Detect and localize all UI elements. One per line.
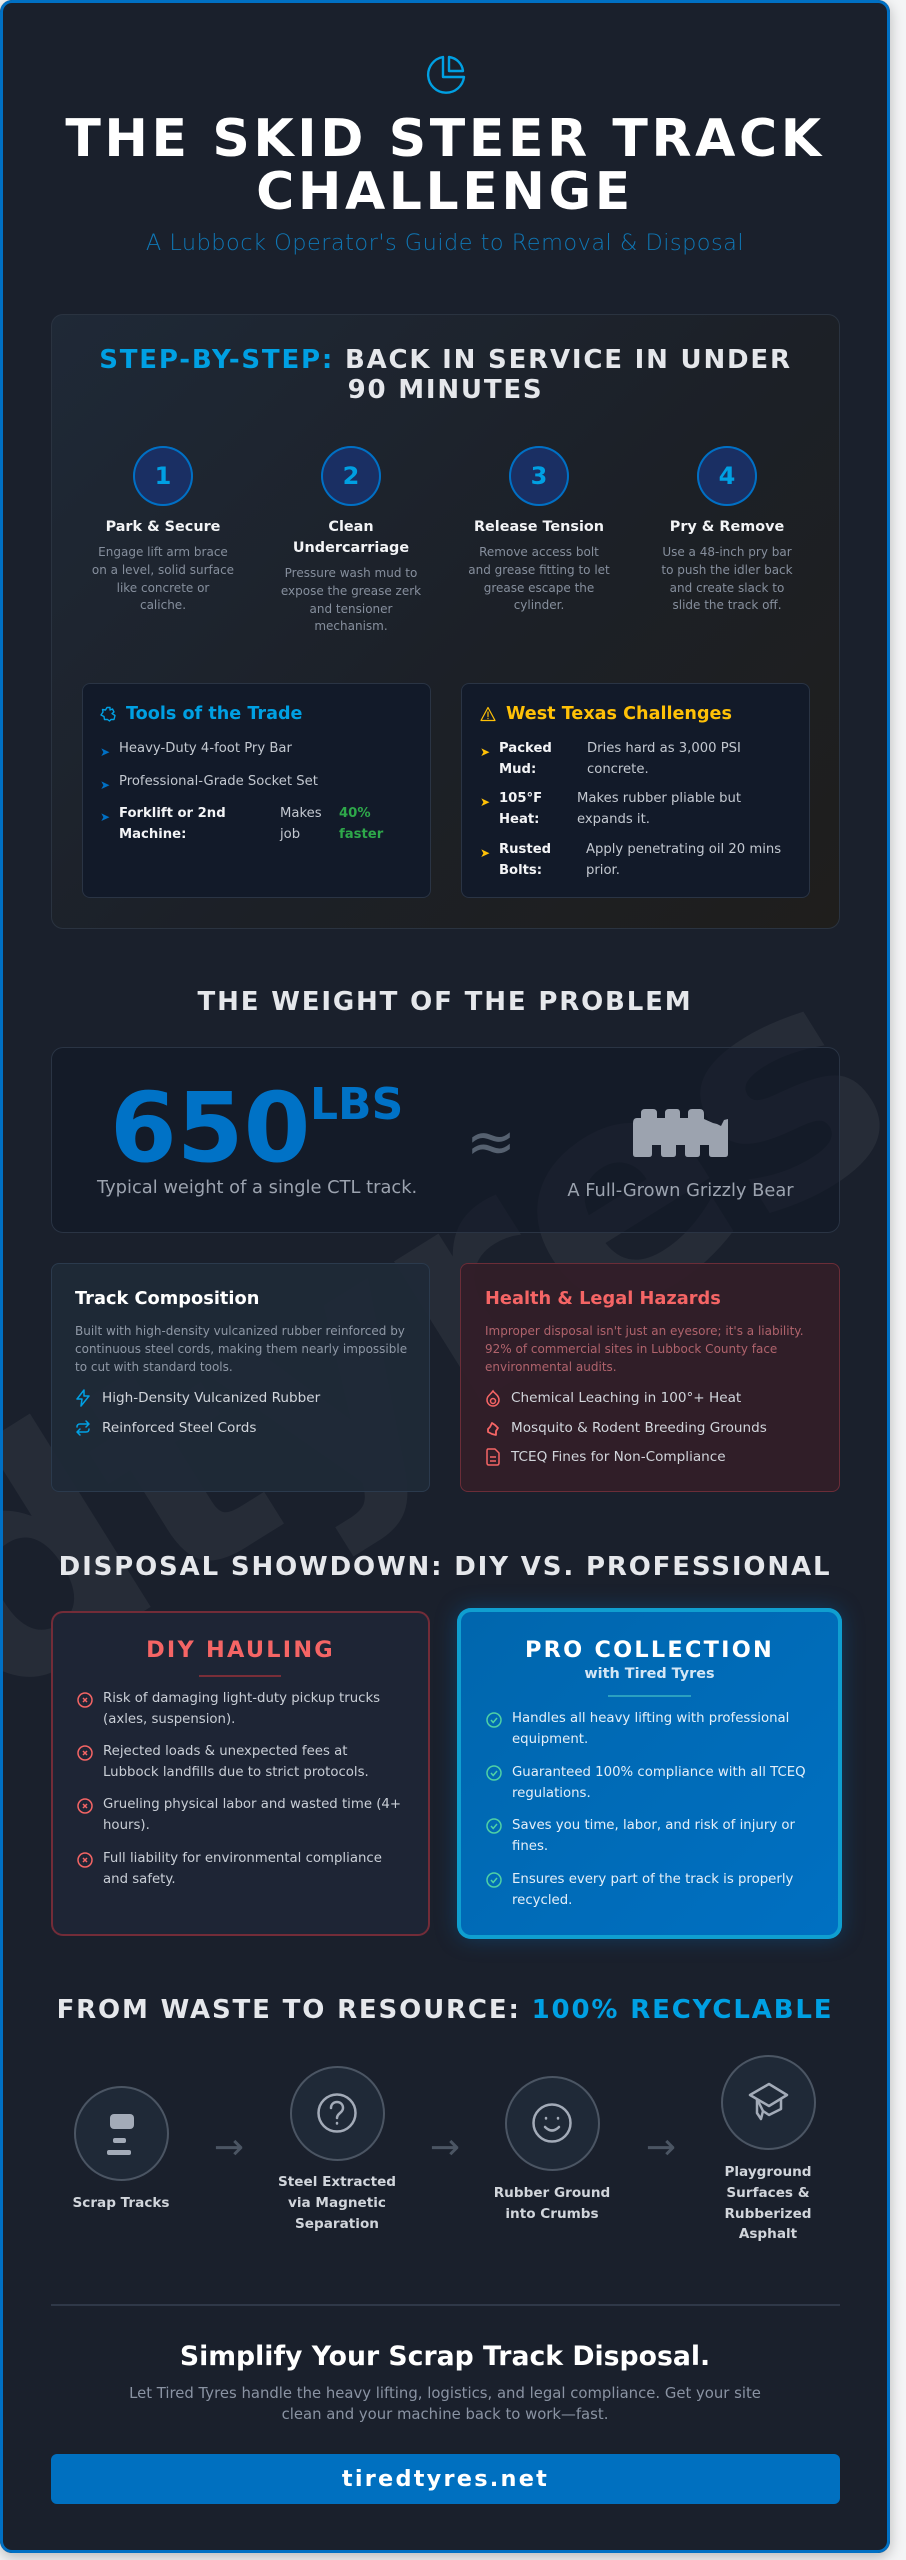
panel: pro collection [457, 1608, 842, 1939]
recycling step 3: rubber crumbs: into Crumbs [505, 2206, 599, 2222]
list: DIY risks: (axles, suspension). [103, 1712, 235, 1727]
call to action text: clean and your machine back to work—fast. [282, 2405, 608, 2423]
challenge list: 105°F [499, 791, 542, 806]
tool list [100, 741, 384, 842]
challenge list: concrete. [587, 762, 649, 777]
call to action heading: Simplify Your Scrap Track Disposal. [180, 2341, 710, 2372]
panel: DIY hauling [51, 1611, 430, 1936]
panel: weight comparison: LBS [310, 1079, 403, 1130]
step 2: expose the grease zerk [281, 584, 421, 598]
list: pro benefits: regulations. [512, 1786, 591, 1801]
tool list: Forklift or 2nd [119, 806, 226, 821]
tool list: faster [339, 827, 383, 842]
list: pro benefits: Ensures every part of the track is properly [512, 1872, 793, 1887]
heading: step-by-step: 90 MINUTES [348, 375, 543, 405]
hazard: pests: Mosquito & Rodent Breeding Grounds [511, 1420, 767, 1436]
step 4: Pry & Remove [670, 519, 784, 535]
step 3: grease escape the [484, 581, 594, 595]
step 1: Engage lift arm brace [98, 545, 228, 559]
call to action text [129, 2384, 761, 2423]
caption: track weight: Typical weight of a single CTL track. [97, 1177, 417, 1198]
heading: pro collection: PRO COLLECTION [525, 1637, 774, 1663]
challenge list: prior. [586, 863, 620, 878]
tool list: Professional-Grade Socket Set [119, 774, 318, 789]
icon: graduation cap [721, 2055, 816, 2150]
recycling step 1: scrap tracks [72, 2086, 170, 2211]
step 3 [468, 446, 610, 612]
challenge list: Mud: [499, 762, 536, 777]
tool list: ➤ [100, 745, 110, 759]
list: pro benefits: fines. [512, 1839, 548, 1854]
recycling step 2: steel extraction [278, 2066, 396, 2232]
step 2: mechanism. [314, 619, 388, 633]
step 3: Release Tension [474, 519, 604, 535]
step 1: like concrete or [117, 581, 209, 595]
panel: track composition [51, 1263, 430, 1492]
step 4: to push the idler back [661, 563, 793, 577]
list: pro benefits: Handles all heavy lifting with professional [512, 1711, 789, 1726]
accent rule [608, 1695, 691, 1697]
recycling step 4: end products: Rubberized [724, 2206, 812, 2222]
recycling step 3: rubber crumbs: Rubber Ground [494, 2185, 610, 2201]
heading: hazards: Health & Legal Hazards [485, 1288, 721, 1309]
tool list: Machine: [119, 827, 186, 842]
step 4: Use a 48-inch pry bar [662, 545, 792, 559]
panel: step-by-step [51, 314, 840, 929]
challenge list: ➤ [480, 795, 490, 809]
list: pro benefits [486, 1711, 806, 1908]
recycling step 2: steel extraction: via Magnetic [288, 2195, 386, 2211]
challenge list: Dries hard as 3,000 PSI [587, 741, 741, 756]
list: DIY risks: Grueling physical labor and wasted time (4+ [103, 1797, 401, 1812]
big number: 650 lbs [110, 1072, 403, 1184]
tool list: ➤ [100, 778, 110, 792]
step 2: Clean [328, 519, 374, 535]
step 3: Remove access bolt [479, 545, 599, 559]
challenge list: ➤ [480, 846, 490, 860]
approximately equal sign: ≈ [466, 1107, 516, 1177]
challenge list: Makes rubber pliable but [577, 791, 741, 806]
icon: smiley circle [505, 2076, 600, 2171]
step 2: and tensioner [310, 602, 392, 616]
step 1: Park & Secure [106, 519, 220, 535]
heading: DIY hauling: DIY HAULING [146, 1637, 335, 1663]
list: pro benefits: Saves you time, labor, and risk of injury or [512, 1818, 795, 1833]
title [65, 109, 825, 222]
challenge list: ➤ [480, 745, 490, 759]
list: DIY risks: Lubbock landfills due to strict protocols. [103, 1765, 369, 1780]
icon: question circle [290, 2066, 385, 2161]
icon: scrap track [74, 2086, 169, 2181]
call to action text: Let Tired Tyres handle the heavy lifting, logistics, and legal compliance. Get your site [129, 2384, 761, 2402]
description: Built with high-density vulcanized rubber reinforced by [75, 1324, 405, 1338]
list: DIY risks: hours). [103, 1818, 150, 1833]
recycling step 4: end products: Playground [724, 2164, 812, 2180]
panel: weight comparison [51, 1047, 840, 1233]
tool list: Makes [280, 806, 322, 821]
challenge list: Bolts: [499, 863, 542, 878]
list: DIY risks [77, 1691, 401, 1887]
list: DIY risks: and safety. [103, 1872, 176, 1887]
heading: disposal showdown: DISPOSAL SHOWDOWN: DIY VS. PROFESSIONAL [59, 1552, 831, 1582]
description: environmental audits. [485, 1360, 617, 1374]
description: Improper disposal isn't just an eyesore; it's a liability. [485, 1324, 804, 1338]
challenge list: Packed [499, 741, 552, 756]
challenge list: Rusted [499, 842, 551, 857]
icon: puzzle piece [100, 706, 116, 722]
list: pro benefits: Guaranteed 100% compliance with all TCEQ [512, 1765, 806, 1780]
step 1: on a level, solid surface [92, 563, 234, 577]
heading: tools: Tools of the Trade [126, 704, 302, 724]
description [75, 1324, 407, 1374]
description: to cut with standard tools. [75, 1360, 233, 1374]
recycling step 2: steel extraction: Separation [295, 2216, 379, 2232]
recycling step 4: end products [721, 2055, 816, 2242]
feature: rubber: High-Density Vulcanized Rubber [102, 1390, 320, 1406]
step 1 [92, 446, 234, 612]
list: DIY risks: Risk of damaging light-duty pickup trucks [103, 1691, 380, 1706]
heading: step-by-step: STEP-BY-STEP: BACK IN SERVICE IN UNDER [99, 345, 792, 375]
recycling step 1: scrap tracks: Scrap Tracks [72, 2195, 170, 2211]
list: DIY risks: Rejected loads & unexpected fees at [103, 1744, 347, 1759]
challenge list [480, 741, 781, 878]
recycling step 2: steel extraction: Steel Extracted [278, 2174, 396, 2190]
caption: grizzly bear: A Full-Grown Grizzly Bear [567, 1180, 794, 1201]
hazard: chemical leaching: Chemical Leaching in 100°+ Heat [511, 1390, 741, 1406]
step 4: and create slack to [670, 581, 784, 595]
arrow: → [646, 2127, 676, 2168]
step 4 [661, 446, 793, 612]
recycling step 4: end products: Asphalt [739, 2226, 797, 2242]
big number: 650 lbs: 650 [110, 1072, 310, 1184]
tool list: job [280, 827, 300, 842]
icon: bear [633, 1109, 728, 1157]
divider [51, 2304, 840, 2306]
feature: steel: Reinforced Steel Cords [102, 1420, 256, 1436]
step 3: cylinder. [514, 598, 564, 612]
hazard: fines: TCEQ Fines for Non-Compliance [511, 1449, 726, 1465]
step 2: Pressure wash mud to [285, 566, 417, 580]
accent rule [199, 1675, 281, 1677]
step 2 [281, 446, 421, 633]
heading: track composition: Track Composition [75, 1288, 259, 1309]
step 1: caliche. [140, 598, 186, 612]
heading: challenges: West Texas Challenges [506, 704, 732, 724]
arrow: → [430, 2127, 460, 2168]
step 1: 1 [155, 462, 171, 490]
challenge list: Heat: [499, 812, 539, 827]
challenge list: Apply penetrating oil 20 mins [586, 842, 781, 857]
step 4: slide the track off. [672, 598, 782, 612]
heading: waste to resource: FROM WASTE TO RESOURCE: 100% RECYCLABLE [57, 1995, 833, 2025]
step 2: 2 [343, 462, 359, 490]
recycling step 3: rubber crumbs [494, 2076, 610, 2222]
icon: warning triangle [480, 706, 496, 722]
description: continuous steel cords, making them nearly impossible [75, 1342, 407, 1356]
step 4: 4 [719, 462, 735, 490]
tool list: Heavy-Duty 4-foot Pry Bar [119, 741, 292, 756]
description: 92% of commercial sites in Lubbock County face [485, 1342, 777, 1356]
challenge list: expands it. [577, 812, 650, 827]
step 3: and grease fitting to let [468, 563, 610, 577]
header icon: pie chart [426, 56, 466, 94]
website button [51, 2454, 840, 2504]
heading: step-by-step [99, 345, 792, 405]
title: CHALLENGE [256, 162, 634, 222]
step 3: 3 [531, 462, 547, 490]
recycling step 4: end products: Surfaces & [726, 2185, 810, 2201]
panel: west texas challenges [461, 683, 810, 898]
description [485, 1324, 804, 1374]
step 2: Undercarriage [293, 540, 409, 556]
list: pro benefits: recycled. [512, 1893, 572, 1908]
list: DIY risks: Full liability for environmental compliance [103, 1851, 382, 1866]
tool list: 40% [339, 806, 371, 821]
title: THE SKID STEER TRACK [65, 109, 825, 169]
website button: tiredtyres.net [342, 2466, 549, 2492]
subtitle: A Lubbock Operator's Guide to Removal & Disposal [146, 230, 744, 256]
subheading: with Tired Tyres: with Tired Tyres [584, 1666, 715, 1682]
arrow: → [214, 2127, 244, 2168]
list: pro benefits: equipment. [512, 1732, 588, 1747]
tool list: ➤ [100, 810, 110, 824]
panel: health and legal hazards [460, 1263, 840, 1492]
panel: tools of the trade [82, 683, 431, 898]
heading: weight of the problem: THE WEIGHT OF THE PROBLEM [198, 987, 692, 1017]
